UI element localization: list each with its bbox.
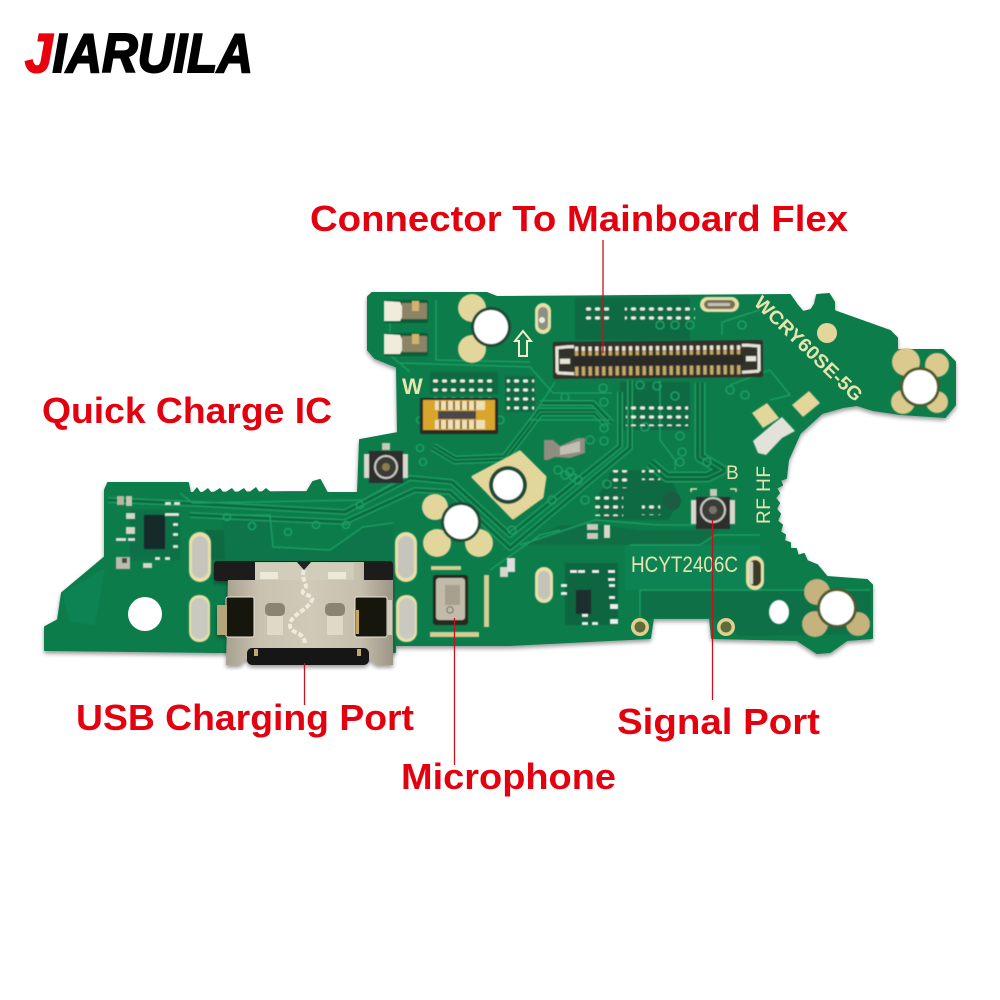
oval pad lower centre: [535, 567, 553, 603]
small parts cluster: [500, 492, 681, 625]
leader line: connector: [602, 240, 604, 353]
via dot grids: [430, 378, 495, 398]
antenna pads: [752, 391, 820, 455]
silk arrow: [515, 331, 531, 356]
bottom ring pads: [631, 618, 735, 636]
mounting hole lower right: [769, 579, 870, 637]
label: Quick Charge IC: Quick Charge IC: [42, 390, 332, 431]
oval pad: [535, 303, 551, 334]
logo: JIARUILA: JIARUILA: [25, 22, 253, 84]
mainboard connector: [553, 340, 763, 379]
label: USB Charging Port: USB Charging Port: [76, 697, 414, 738]
board outline: [45, 293, 955, 653]
microphone: [430, 566, 489, 637]
label: Signal Port: Signal Port: [617, 701, 820, 742]
silk RF HF: RF HF: [754, 466, 775, 524]
pcb board: [45, 292, 955, 665]
solder pill pads around usb: [189, 532, 417, 642]
silk WCRY60SE-5G: WCRY60SE-5G: [750, 292, 866, 406]
vias: [224, 321, 749, 536]
lower mounting hole: [422, 494, 493, 557]
mounting hole right: [891, 348, 949, 414]
oval pad right: [746, 556, 764, 590]
copper traces and shaded planes: [62, 298, 870, 636]
silk B: B: [726, 463, 739, 484]
centre mounting pad: [473, 452, 545, 518]
left components: [116, 496, 180, 569]
quick charge ic: [420, 398, 498, 434]
silk W: W: [402, 374, 423, 399]
label: Microphone: Microphone: [401, 756, 616, 797]
usb charging port: [214, 561, 393, 665]
edge teeth top left: [192, 487, 272, 493]
leader line: usb: [304, 663, 306, 705]
signal port: [691, 489, 736, 529]
contact pads top left: [384, 300, 428, 356]
gold dot: [817, 323, 837, 343]
small signal socket left: [364, 443, 408, 483]
label: Connector To Mainboard Flex: Connector To Mainboard Flex: [310, 198, 848, 239]
leader line: microphone: [454, 618, 456, 765]
trace bundle: lower left to centre: [108, 392, 620, 535]
mounting hole top: [458, 294, 511, 363]
leader line: signal: [712, 520, 714, 700]
silver solder bit: [544, 438, 585, 460]
mounting hole left: [128, 597, 162, 631]
silk HCYT2406C: HCYT2406C: [631, 552, 738, 577]
trace bundle: lower right of connector: [650, 383, 722, 477]
horizontal oval pad: [700, 297, 739, 312]
trace bundle: upper centre: [433, 412, 608, 460]
